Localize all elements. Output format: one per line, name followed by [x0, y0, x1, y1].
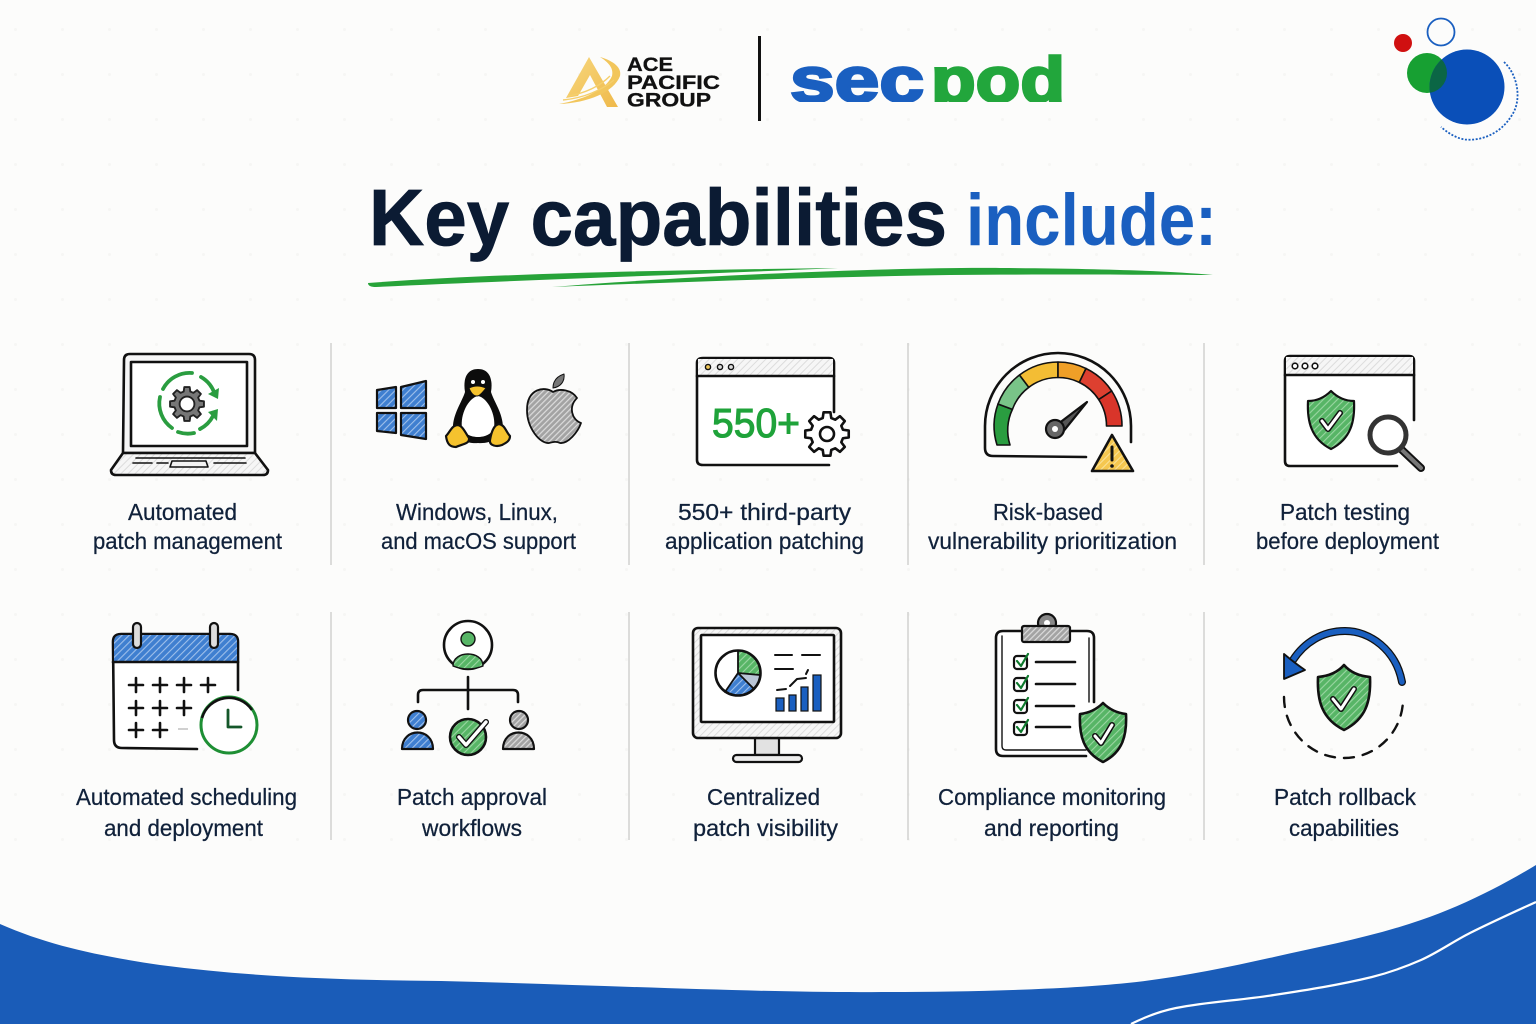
title: include: — [966, 180, 1217, 261]
logo: Ace Pacific Group — [559, 54, 720, 112]
label: Centralized — [707, 784, 820, 810]
icon: windows logo — [377, 381, 426, 439]
label: Risk-based — [993, 499, 1103, 525]
decorative circles — [1394, 18, 1518, 140]
icon: app window with gear — [697, 358, 849, 465]
label: capabilities — [1289, 815, 1399, 841]
card: patch rollback — [1274, 631, 1416, 841]
label: Compliance monitoring — [938, 784, 1166, 810]
icon: clipboard with shield — [996, 614, 1126, 762]
card: patch testing — [1256, 356, 1440, 554]
logo: SecPod: sec — [790, 44, 924, 116]
label: workflows — [421, 815, 522, 841]
logo: SecPod — [790, 54, 1062, 102]
card: patch approval workflows — [397, 621, 547, 841]
icon: calendar with clock — [113, 623, 257, 753]
icon: window with shield and magnifier — [1285, 356, 1421, 468]
icon: linux penguin — [446, 369, 510, 447]
label: Patch approval — [397, 784, 547, 810]
title: Key capabilities — [369, 173, 947, 262]
label: and reporting — [984, 815, 1119, 841]
logo: Ace Pacific Group: ACE — [627, 54, 673, 76]
icon: apple logo — [527, 374, 581, 443]
label: Patch testing — [1280, 499, 1410, 525]
label: Patch rollback — [1274, 784, 1416, 810]
logo: Ace Pacific Group: PACIFIC — [627, 72, 720, 94]
icon: risk gauge with warning — [985, 353, 1133, 471]
label: vulnerability prioritization — [928, 528, 1177, 554]
label: application patching — [665, 528, 864, 554]
icon: app window with gear: 550+ — [712, 400, 800, 446]
label: patch visibility — [693, 815, 839, 841]
logo divider — [758, 36, 761, 121]
title underline — [368, 268, 1213, 287]
card: 550+ third-party — [665, 358, 864, 554]
logo: Ace Pacific Group: GROUP — [627, 90, 711, 112]
footer wave — [0, 865, 1536, 1024]
card: windows linux macos — [377, 369, 581, 554]
card: automated patch management — [93, 354, 283, 554]
icon: laptop with gear — [111, 354, 268, 475]
logo: SecPod: pod — [931, 44, 1065, 116]
card: centralized patch visibility — [693, 628, 841, 841]
label: Windows, Linux, — [396, 499, 558, 525]
label: Automated — [128, 499, 237, 525]
label: patch management — [93, 528, 283, 554]
column dividers — [331, 343, 1204, 840]
card: risk-based prioritization — [928, 353, 1177, 554]
icon: approval tree — [402, 621, 534, 755]
label: Automated scheduling — [76, 784, 297, 810]
label: before deployment — [1256, 528, 1440, 554]
card: compliance monitoring — [938, 614, 1166, 841]
label: and deployment — [104, 815, 264, 841]
icon: monitor dashboard — [693, 628, 841, 762]
label: and macOS support — [381, 528, 577, 554]
icon: rollback arrow and shield — [1284, 631, 1403, 758]
label: 550+ third-party — [678, 499, 852, 525]
card: automated scheduling — [76, 623, 297, 841]
